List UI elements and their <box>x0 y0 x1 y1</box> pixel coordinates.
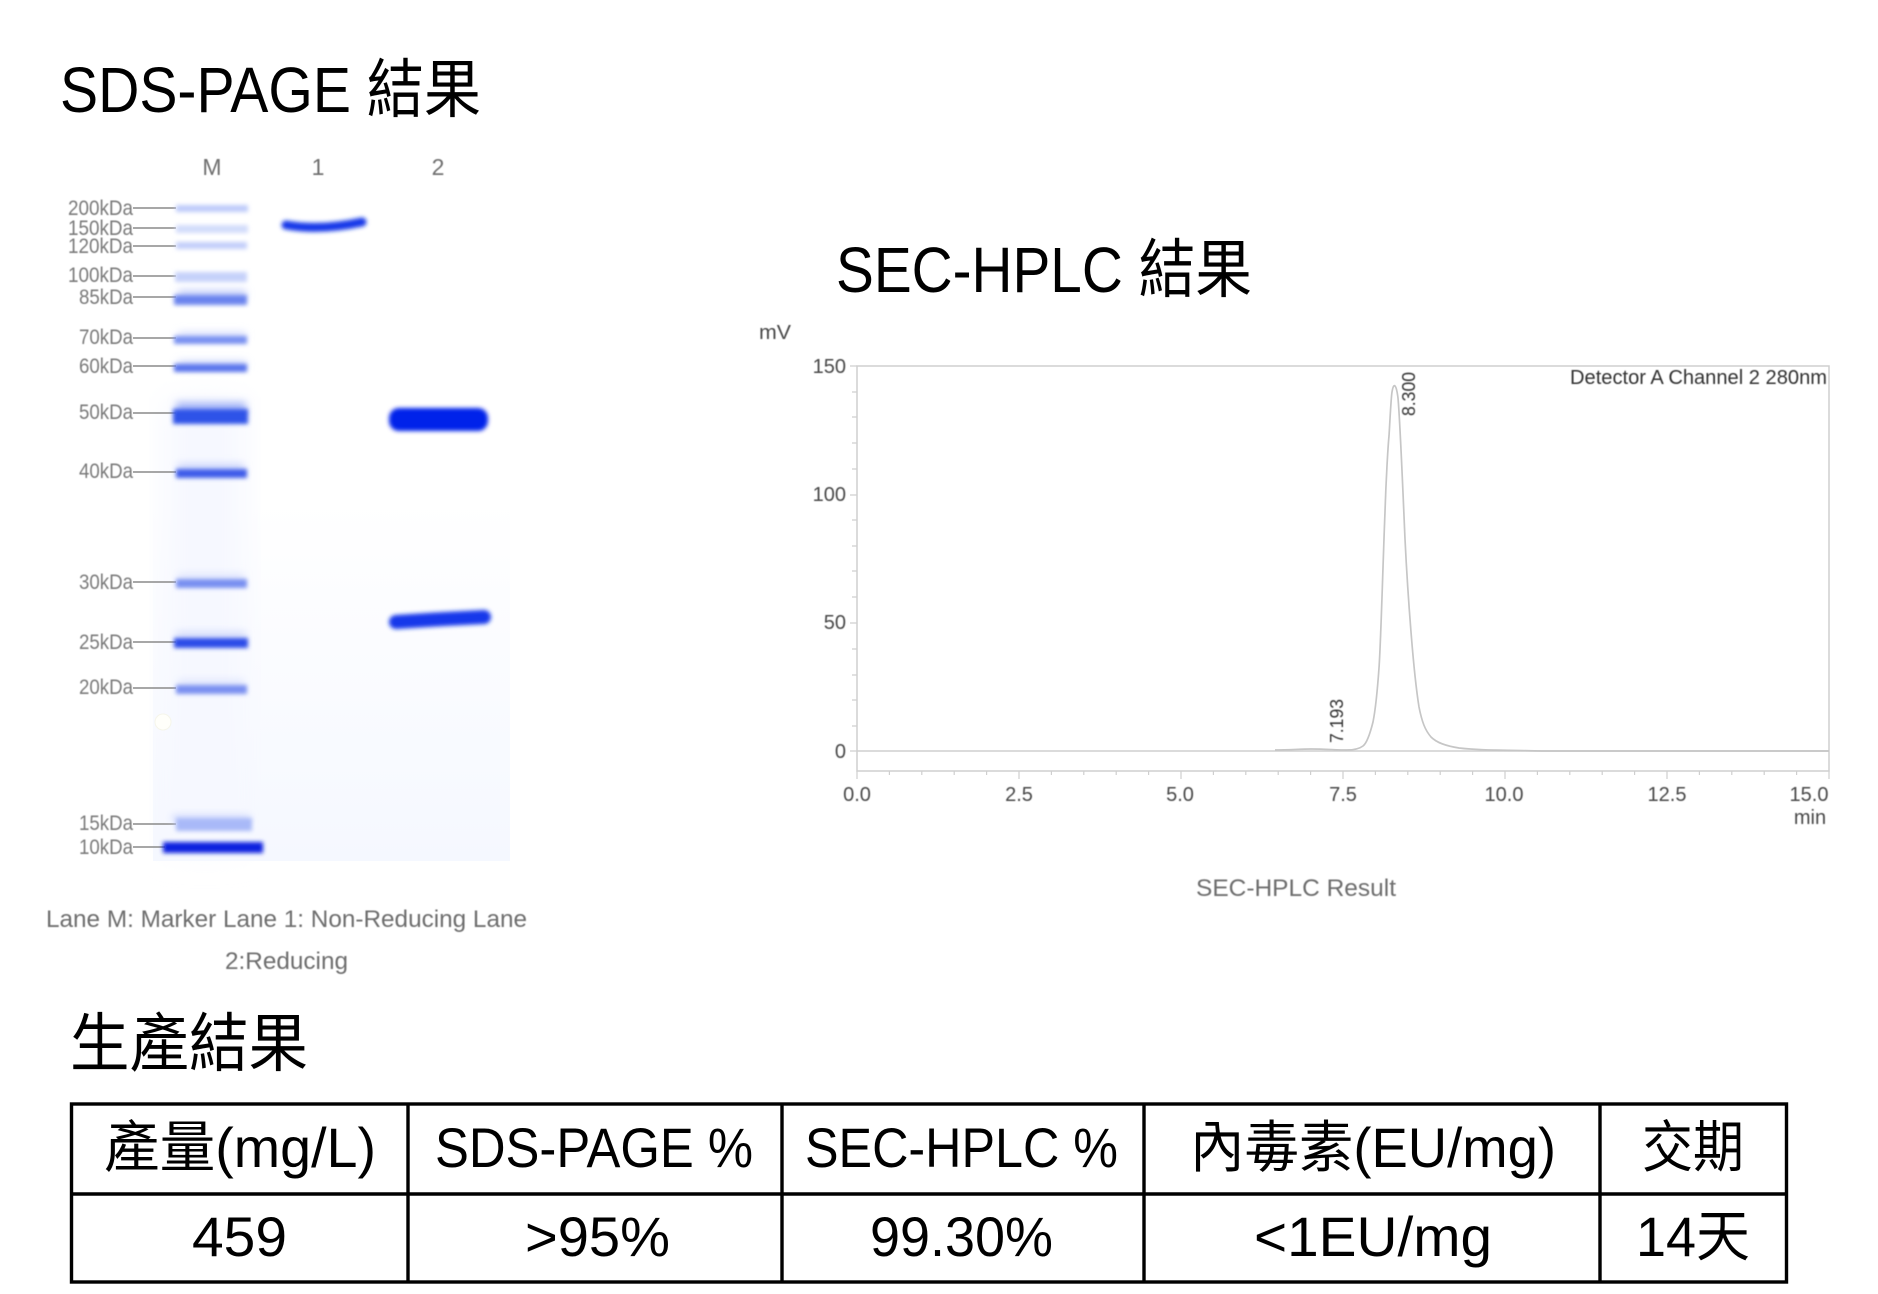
chart: SEC-HPLC chromatogram <box>759 322 1829 829</box>
marker size labels: 10kDa <box>79 836 133 859</box>
x axis labels: min <box>1794 807 1826 829</box>
x axis labels: 7.5 <box>1329 784 1357 806</box>
x axis labels: 10.0 <box>1485 784 1523 806</box>
peak label 8.300: 8.300 <box>1399 372 1419 416</box>
marker lines <box>133 208 176 847</box>
plot frame and baseline <box>857 366 1829 771</box>
table value row: >95% <box>525 1205 670 1268</box>
marker size labels: 15kDa <box>79 812 133 835</box>
marker size labels: 100kDa <box>68 264 133 287</box>
table header row <box>104 1116 1744 1179</box>
y axis labels <box>759 322 846 763</box>
x axis labels: 5.0 <box>1166 784 1194 806</box>
marker size labels: 200kDa <box>68 197 133 220</box>
y axis labels: 150 <box>813 356 846 378</box>
table value row <box>192 1205 1750 1268</box>
lane 2 reducing heavy chain band <box>389 408 488 431</box>
y axis labels: mV <box>759 322 792 344</box>
caption: gel lanes: Lane M: Marker Lane 1: Non-Reducing Lane <box>46 906 527 933</box>
table value row: 459 <box>192 1205 287 1268</box>
lane 1 non-reducing band <box>286 222 362 227</box>
y axis labels: 50 <box>824 612 846 634</box>
x axis labels: 12.5 <box>1648 784 1686 806</box>
lane headers: 1 <box>312 154 324 180</box>
marker size labels: 85kDa <box>79 286 133 309</box>
marker size labels: 20kDa <box>79 676 133 699</box>
title: SEC-HPLC result: SEC-HPLC 結果 <box>836 234 1252 306</box>
marker size labels: 120kDa <box>68 235 133 258</box>
table header row: SDS-PAGE % <box>435 1116 753 1179</box>
table header row: 產量(mg/L) <box>104 1116 376 1179</box>
x axis labels: 2.5 <box>1005 784 1033 806</box>
marker size labels: 30kDa <box>79 571 133 594</box>
lane headers: 2 <box>432 154 444 180</box>
chromatogram trace <box>1275 386 1829 751</box>
table: production results <box>72 1104 1786 1282</box>
marker size labels: 70kDa <box>79 326 133 349</box>
caption: SEC-HPLC: SEC-HPLC Result <box>1196 875 1396 902</box>
marker size labels: 150kDa <box>68 217 133 240</box>
lane headers: M <box>202 154 222 180</box>
detector label: Detector A Channel 2 280nm <box>1570 367 1827 389</box>
marker size labels: 40kDa <box>79 460 133 483</box>
gel background <box>153 400 510 861</box>
x axis ticks <box>857 771 1829 779</box>
table header row: SEC-HPLC % <box>805 1116 1118 1179</box>
x axis labels: 15.0 <box>1790 784 1828 806</box>
lane headers <box>202 154 444 180</box>
marker size labels: 60kDa <box>79 355 133 378</box>
table header row: 交期 <box>1642 1116 1744 1179</box>
y axis ticks <box>850 366 857 751</box>
peak label 7.193: 7.193 <box>1327 699 1347 743</box>
lane M marker band halos <box>172 290 250 821</box>
marker size labels: 25kDa <box>79 631 133 654</box>
title: production result: 生產結果 <box>70 1008 308 1080</box>
title: SDS-PAGE result: SDS-PAGE 結果 <box>60 54 481 126</box>
table value row: 99.30% <box>870 1205 1053 1268</box>
table grid <box>72 1104 1786 1282</box>
table value row: <1EU/mg <box>1254 1205 1492 1268</box>
table header row: 內毒素(EU/mg) <box>1190 1116 1556 1179</box>
marker size labels: 50kDa <box>79 401 133 424</box>
x axis labels: 0.0 <box>843 784 871 806</box>
marker size labels <box>68 197 133 859</box>
lane M marker bands <box>163 205 263 853</box>
y axis labels: 0 <box>835 741 846 763</box>
x axis labels <box>843 784 1828 829</box>
y axis labels: 100 <box>813 484 846 506</box>
caption: gel lanes <box>46 906 527 975</box>
caption: gel lanes: 2:Reducing <box>225 948 348 975</box>
lane 2 reducing light chain band <box>396 617 484 622</box>
table value row: 14天 <box>1636 1205 1750 1268</box>
panel: SDS-PAGE gel <box>68 154 510 861</box>
